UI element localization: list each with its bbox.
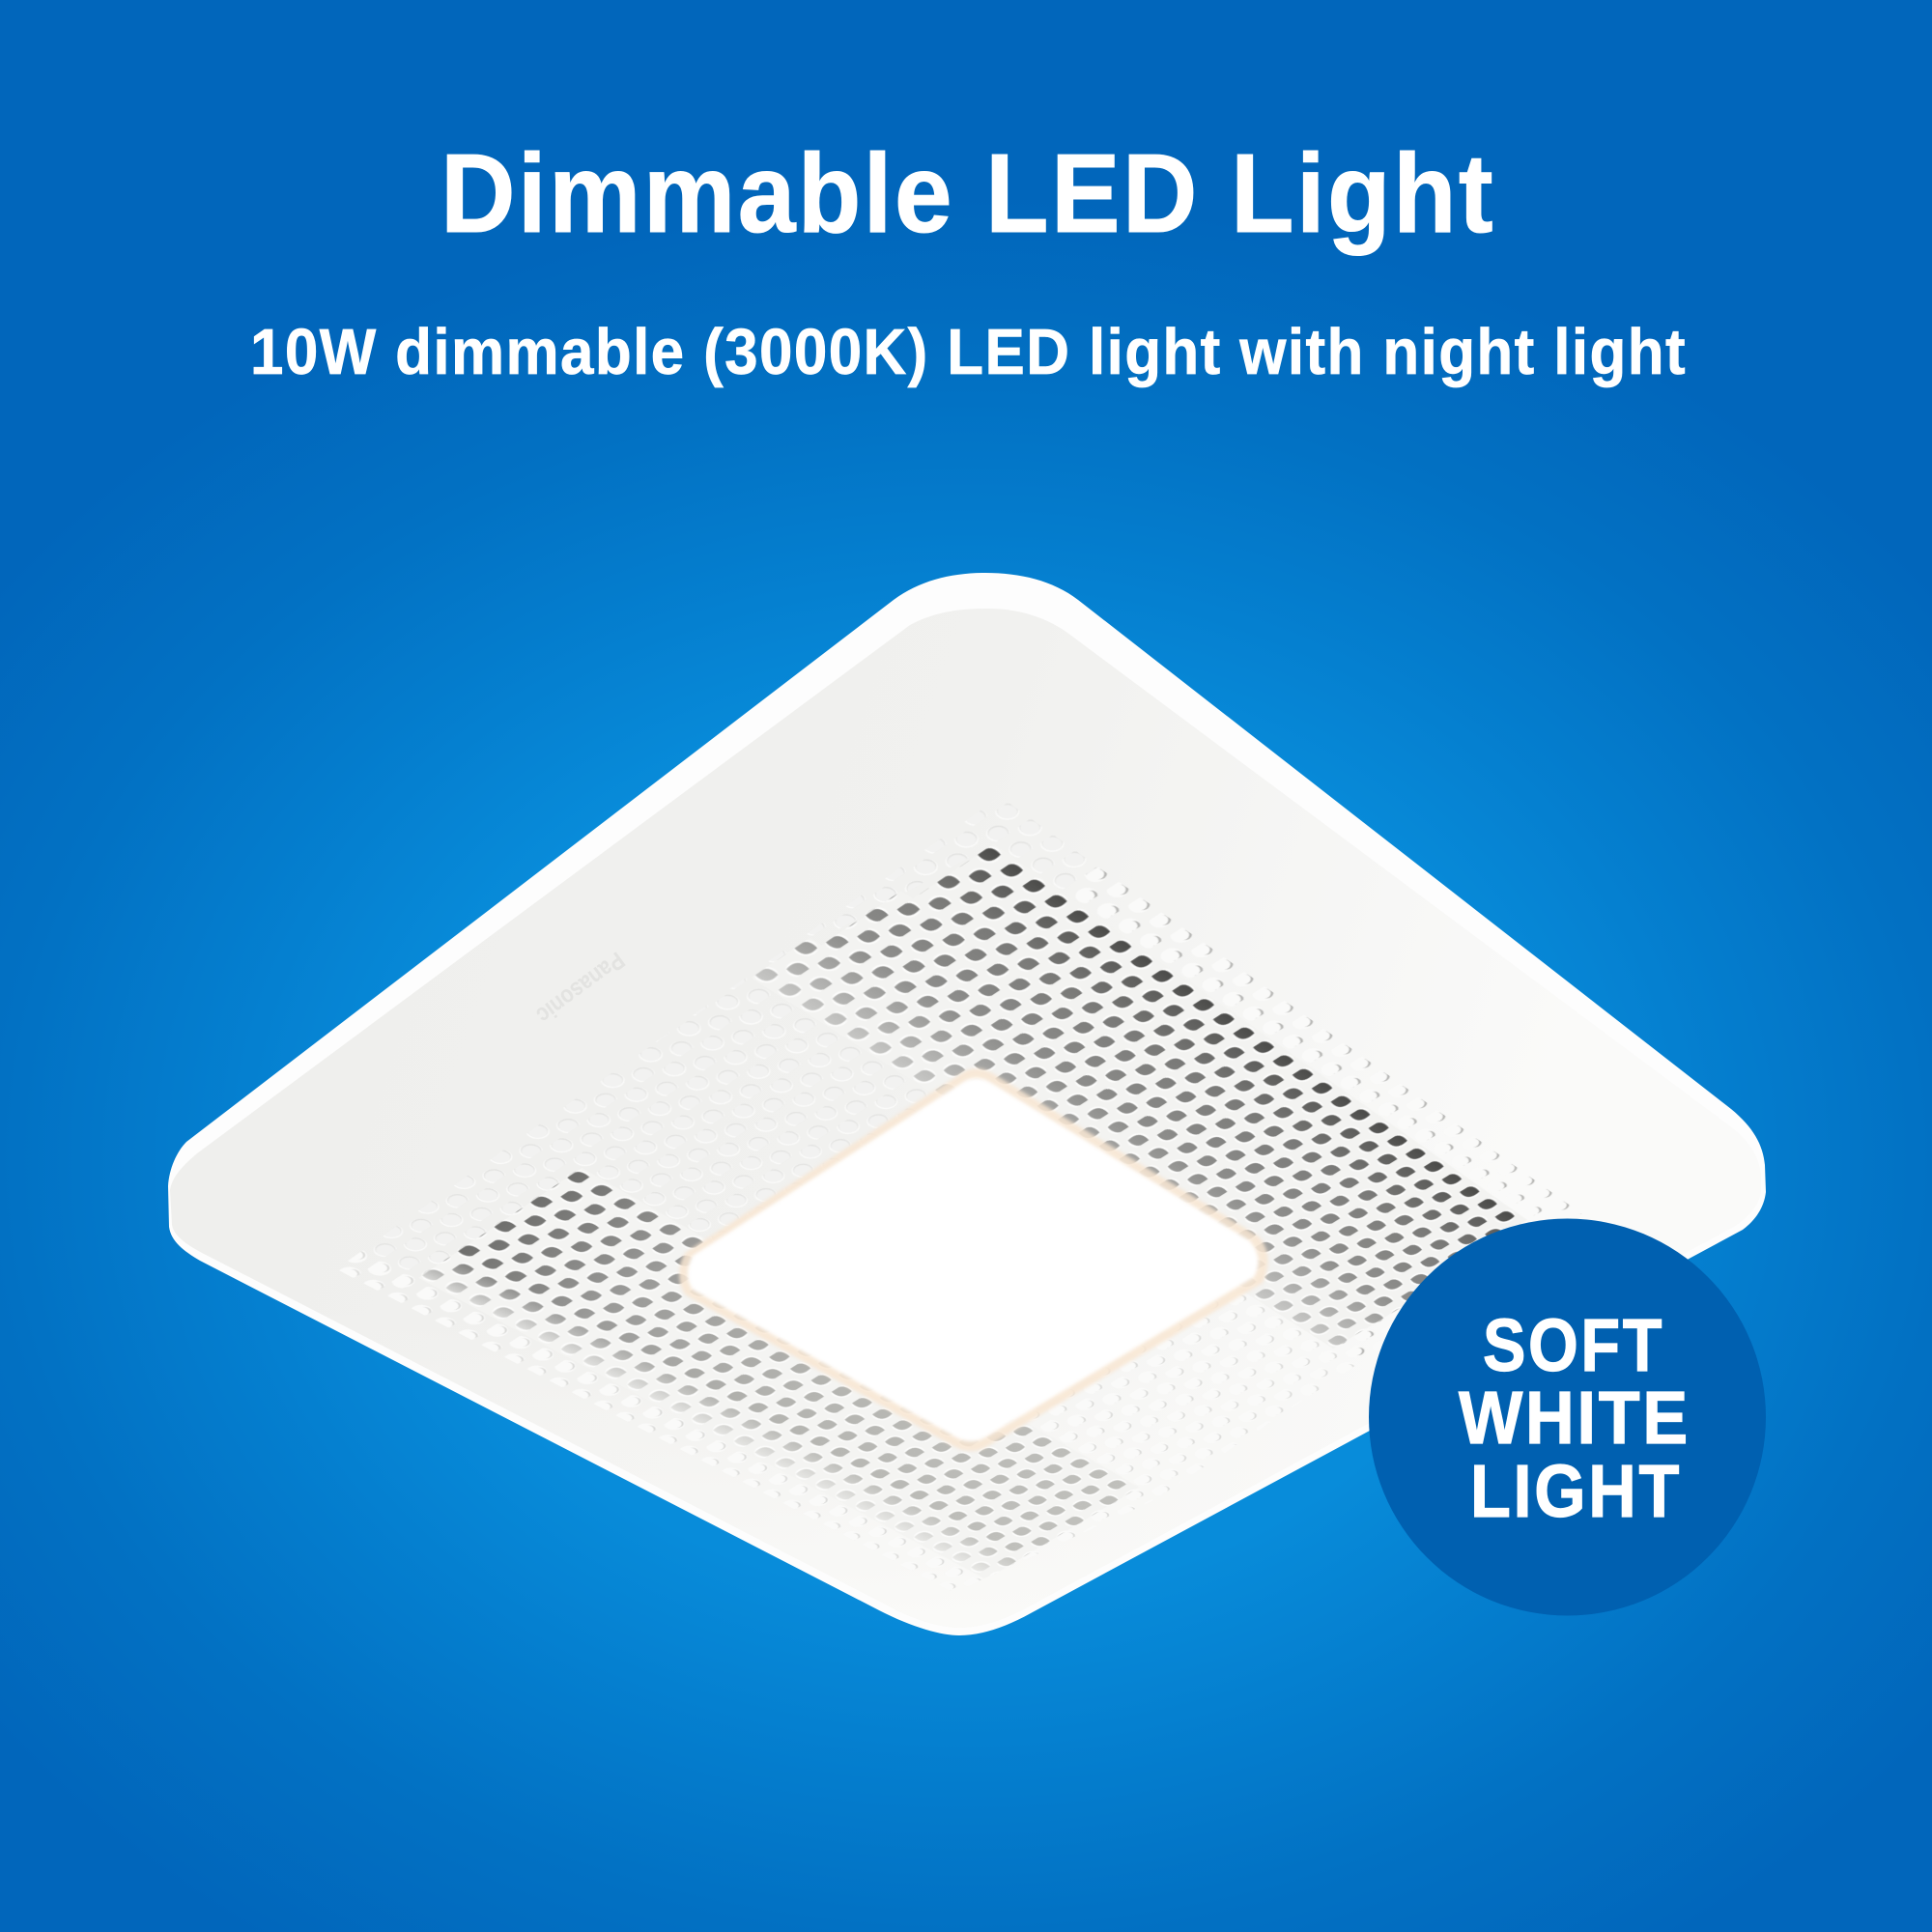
round dimples on the left (349, 804, 1097, 1289)
crescent dimples on the top and right (1076, 869, 1582, 1356)
embossed Panasonic logo: Panasonic (531, 947, 630, 1029)
faint dimples beside the lower right of the LED (1011, 1295, 1354, 1565)
badge text line: LIGHT: LIGHT (1470, 1450, 1682, 1533)
through-hole block: upper (752, 828, 1536, 1349)
through-hole block: lower (418, 1168, 1140, 1580)
badge text line: SOFT: SOFT (1483, 1304, 1664, 1387)
badge text line: WHITE: WHITE (1459, 1377, 1690, 1460)
faint dimples along the bottom rows (340, 1252, 981, 1588)
subtitle: 10W dimmable (3000K) LED light with night light (250, 316, 1687, 388)
title: Dimmable LED Light (440, 130, 1495, 256)
perforated speaker grid in perspective (340, 804, 1582, 1588)
badge: soft white light (1369, 1219, 1766, 1615)
